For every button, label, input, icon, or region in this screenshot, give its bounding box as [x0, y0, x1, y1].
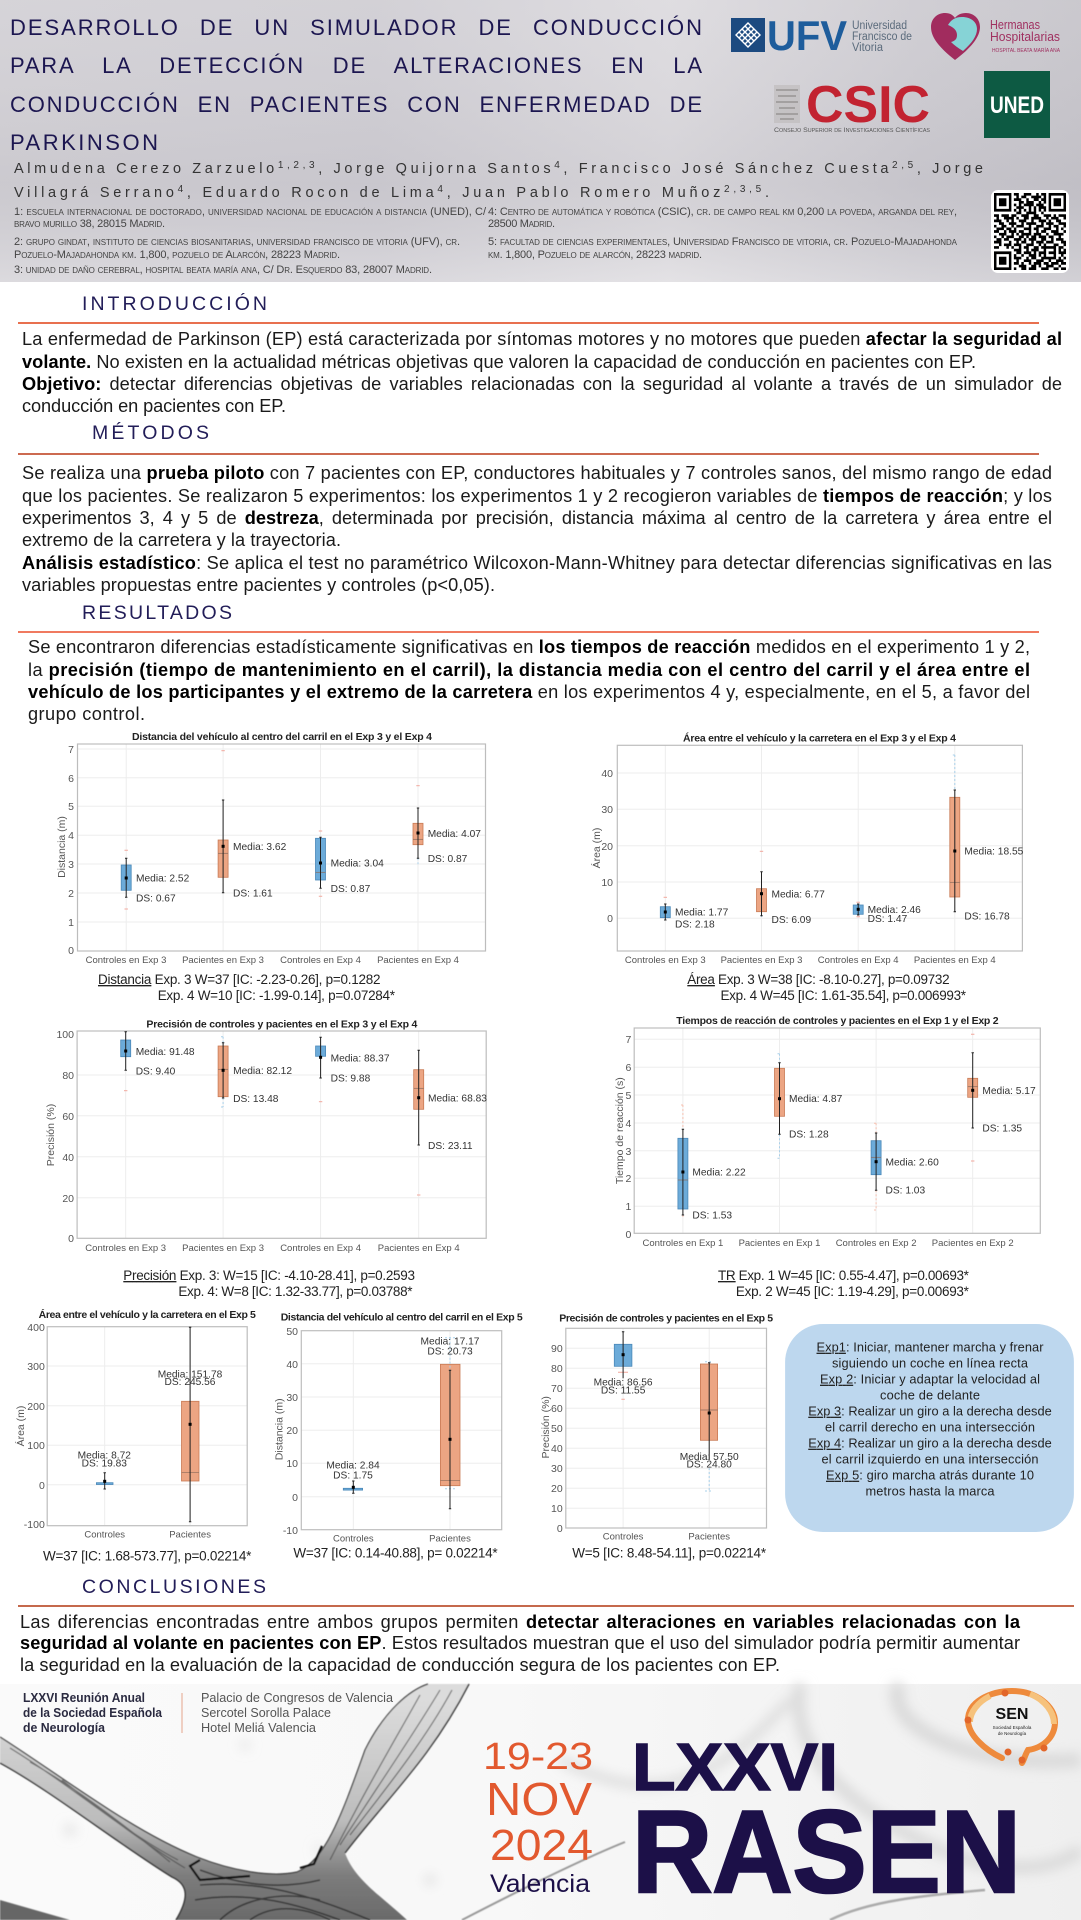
box: controles Exp 4: DS: 1.47 — [868, 914, 908, 925]
y axis: 20 — [601, 841, 613, 853]
callout: descripción de experimentos: Exp 3: Realizar un giro a la derecha desde — [808, 1404, 1052, 1419]
chart: tiempos de reacción Exp 1 y Exp 2 — [614, 1015, 1040, 1299]
logo: SEN: Sociedad Española — [993, 1725, 1032, 1730]
x axis — [625, 955, 996, 966]
y axis: 200 — [27, 1401, 45, 1413]
chart: precisión Exp 5 — [540, 1312, 773, 1561]
stats caption: TR Exp. 1 W=45 [IC: 0.55-4.47], p=0.00693* — [718, 1268, 970, 1283]
event dates: 19-23 — [483, 1736, 593, 1778]
x axis: Pacientes en Exp 4 — [377, 955, 459, 966]
y axis: Área (m) — [14, 1406, 27, 1446]
y axis: 100 — [27, 1440, 45, 1452]
x axis: Pacientes en Exp 4 — [378, 1243, 460, 1254]
title — [10, 15, 702, 155]
logo: Hermanas Hospitalarias — [931, 13, 1061, 60]
logo: UFV: Francisco de — [852, 31, 912, 43]
box: pacientes: Media: 151.78 — [158, 1369, 223, 1380]
affiliations — [14, 206, 958, 276]
chart title: Tiempos de reacción de controles y pacientes en el Exp 1 y el Exp 2 — [676, 1015, 999, 1027]
stats caption — [123, 1268, 415, 1299]
y axis: 0 — [626, 1229, 632, 1241]
stats caption: W=5 [IC: 8.48-54.11], p=0.02214* — [572, 1546, 767, 1561]
x axis: Pacientes en Exp 1 — [739, 1238, 820, 1249]
box: pacientes Exp 3: Media: 6.77 — [772, 889, 825, 900]
congress info: Hotel Meliá Valencia — [201, 1721, 316, 1735]
x axis: Pacientes — [688, 1531, 730, 1542]
y axis: 7 — [626, 1034, 632, 1046]
box: pacientes: DS: 24.80 — [687, 1460, 732, 1471]
chart title: Área entre el vehículo y la carretera en el Exp 3 y el Exp 4 — [683, 732, 956, 745]
box: pacientes Exp 3: Media: 3.62 — [233, 842, 287, 853]
congress info: Palacio de Congresos de Valencia — [201, 1691, 393, 1705]
authors: 4 — [437, 184, 443, 195]
box: pacientes Exp 1: DS: 1.28 — [789, 1130, 829, 1141]
box: controles Exp 4: Media: 2.46 — [868, 905, 921, 916]
panel: conclusiones — [18, 1576, 1074, 1675]
logo: UNED — [984, 71, 1050, 138]
affiliations: km. 1,800, Pozuelo de alarcón, 28223 madrid. — [488, 249, 702, 261]
box: controles: Media: 86.56 — [594, 1377, 653, 1388]
y axis: -10 — [283, 1525, 298, 1537]
text block: métodos: Se realiza una prueba piloto con 7 pacientes con EP, conductores habituales y 7 controles sanos, del mismo rango de edad — [22, 463, 1052, 483]
title: DESARROLLO DE UN SIMULADOR DE CONDUCCIÓN — [10, 15, 702, 40]
y axis: 40 — [601, 768, 613, 780]
authors: Villagrá Serrano — [14, 185, 174, 201]
callout: descripción de experimentos: Exp 5: giro marcha atrás durante 10 — [826, 1468, 1034, 1483]
y axis: 0 — [607, 913, 613, 925]
congress info — [23, 1691, 393, 1735]
x axis: Pacientes en Exp 3 — [721, 955, 802, 966]
x axis: Pacientes — [169, 1529, 211, 1540]
box: controles: Media: 8.72 — [78, 1451, 131, 1462]
authors: 4 — [178, 184, 184, 195]
callout: descripción de experimentos: Exp 4: Realizar un giro a la derecha desde — [808, 1436, 1052, 1451]
box: pacientes Exp 4 — [413, 786, 481, 865]
x axis — [86, 955, 459, 966]
box: controles Exp 4: DS: 0.87 — [331, 884, 371, 895]
box: pacientes Exp 3: DS: 6.09 — [772, 915, 811, 926]
y axis: Precisión (%) — [45, 1104, 57, 1166]
authors: , Juan Pablo Romero Muñoz — [447, 185, 720, 201]
box: pacientes Exp 3 — [218, 751, 287, 900]
panel: footer banner — [0, 1684, 1081, 1920]
box: pacientes — [158, 1327, 223, 1522]
box: controles Exp 3 — [660, 897, 729, 930]
chart title: Distancia del vehículo al centro del carril en el Exp 3 y el Exp 4 — [132, 731, 432, 743]
text block: introducción — [22, 329, 1062, 416]
congress info: LXXVI Reunión Anual — [23, 1691, 145, 1705]
text block: resultados: la precisión (tiempo de mantenimiento en el carril), la distancia media con el centro del carril y el área entre el — [28, 660, 1030, 680]
stats caption — [687, 972, 967, 1003]
y axis: 300 — [27, 1361, 45, 1373]
logo: CSIC: Consejo Superior de Investigaciones Científicas — [774, 127, 931, 134]
affiliations: bravo murillo 38, 28015 Madrid. — [14, 218, 165, 230]
heading: introducción: INTRODUCCIÓN — [82, 292, 267, 315]
heading: resultados: RESULTADOS — [82, 602, 232, 624]
chart: área Exp 3 y Exp 4 — [590, 732, 1024, 1003]
chart title: Área entre el vehículo y la carretera en el Exp 5 — [39, 1308, 256, 1321]
y axis: 10 — [601, 877, 613, 889]
chart title: Precisión de controles y pacientes en el Exp 5 — [559, 1312, 773, 1324]
affiliations: 2: grupo gindat, instituto de ciencias biosanitarias, universidad francisco de vitoria (UFV), cr. — [14, 236, 460, 248]
box: pacientes Exp 4: DS: 23.11 — [428, 1141, 473, 1152]
chart: área Exp 5 — [14, 1308, 256, 1564]
box: controles Exp 3 — [121, 850, 190, 909]
event dates: Valencia — [490, 1870, 590, 1898]
y axis: 4 — [68, 830, 74, 842]
box: pacientes — [421, 1336, 480, 1509]
y axis: 7 — [68, 744, 74, 756]
box: controles Exp 4: DS: 9.88 — [331, 1074, 371, 1085]
y axis: 40 — [286, 1359, 298, 1371]
text block: conclusiones: la seguridad en la evaluación de la capacidad de conducción segura de los pacientes con EP. — [20, 1655, 780, 1675]
box: controles — [78, 1451, 131, 1489]
logo: SEN: SEN — [996, 1706, 1028, 1723]
y axis: 100 — [56, 1029, 74, 1041]
y axis: 0 — [292, 1492, 298, 1504]
logo: Hermanas Hospitalarias: HOSPITAL BEATA MARÍA ANA — [992, 47, 1061, 54]
box: pacientes: DS: 245.56 — [165, 1377, 216, 1388]
box: controles — [594, 1332, 653, 1399]
header background — [0, 0, 1081, 282]
box: controles Exp 4: Media: 3.04 — [331, 859, 384, 870]
y axis — [590, 768, 613, 925]
y axis: 2 — [68, 888, 74, 900]
box: controles Exp 1: DS: 1.53 — [692, 1210, 732, 1221]
authors: 4 — [554, 160, 560, 171]
callout: descripción de experimentos: siguiendo un coche en línea recta — [832, 1356, 1029, 1371]
text block: resultados: grupo control. — [28, 704, 145, 724]
box: controles Exp 3: DS: 2.18 — [675, 919, 715, 930]
authors: 1,2,3 — [278, 160, 315, 171]
x axis: Pacientes en Exp 2 — [932, 1238, 1014, 1249]
event name — [632, 1730, 1021, 1917]
stats caption — [718, 1268, 970, 1299]
box: pacientes: Media: 57.50 — [680, 1452, 739, 1463]
x axis — [85, 1243, 460, 1254]
y axis: 0 — [68, 1233, 74, 1245]
y axis — [540, 1343, 563, 1535]
callout: descripción de experimentos: Exp 2: Iniciar y adaptar la velocidad al — [820, 1372, 1040, 1387]
box: controles Exp 4 — [316, 1037, 390, 1102]
x axis: Pacientes en Exp 4 — [914, 955, 996, 966]
box: controles: DS: 19.83 — [82, 1459, 127, 1470]
event name: LXXVI — [632, 1730, 838, 1805]
box: pacientes Exp 1: Media: 4.87 — [789, 1094, 843, 1105]
QR code — [991, 190, 1069, 273]
y axis: 3 — [68, 859, 74, 871]
y axis: 4 — [626, 1118, 632, 1130]
y axis: 10 — [286, 1458, 298, 1470]
text block: métodos: extremo de la carretera y la trayectoria. — [22, 530, 341, 550]
chart: distancia Exp 3 y Exp 4 — [56, 731, 486, 1003]
authors: , Eduardo Rocon de Lima — [187, 185, 435, 201]
stats caption: W=37 [IC: 0.14-40.88], p= 0.02214* — [293, 1546, 498, 1561]
y axis: 0 — [39, 1480, 45, 1492]
y axis: 50 — [286, 1326, 298, 1338]
box: controles Exp 3: Media: 2.52 — [136, 874, 190, 885]
affiliations: Pozuelo-Majadahonda km. 1,800, pozuelo de Alarcón, 28223 Madrid. — [14, 249, 340, 261]
affiliations: 5: facultad de ciencias experimentales, Universidad Francisco de vitoria, cr. Pozuelo-Majadahonda — [488, 236, 958, 248]
y axis — [274, 1326, 298, 1537]
x axis: Controles en Exp 3 — [625, 955, 706, 966]
affiliations: 28500 Madrid. — [488, 218, 555, 230]
box: pacientes Exp 4: Media: 4.07 — [428, 829, 481, 840]
y axis: 80 — [551, 1363, 563, 1375]
logo: SEN: de Neurología — [998, 1731, 1027, 1736]
panel: introducción — [18, 292, 1062, 416]
text block: métodos: Análisis estadístico: Se aplica el test no paramétrico Wilcoxon-Mann-Whitney para detectar diferencias significativas en las — [22, 553, 1052, 573]
text block: conclusiones: seguridad al volante en pacientes con EP. Estos resultados muestran que el uso del simulador podría permitir aumentar — [20, 1633, 1020, 1653]
box: pacientes Exp 1 — [774, 1054, 843, 1158]
logo: UFV: UFV — [767, 12, 847, 59]
callout: descripción de experimentos: el carril derecho en una intersección — [825, 1420, 1035, 1435]
x axis: Controles en Exp 4 — [280, 955, 361, 966]
text block: métodos: experimentos 3, 4 y 5 de destreza, determinada por precisión, distancia máxima al centro de la carretera y área entre el — [22, 508, 1052, 528]
box: controles Exp 4 — [316, 831, 384, 896]
stats caption: Área Exp. 3 W=38 [IC: -8.10-0.27], p=0.09732 — [687, 972, 950, 987]
y axis: 20 — [286, 1425, 298, 1437]
authors: . — [765, 185, 769, 201]
authors: , Francisco José Sánchez Cuesta — [563, 161, 889, 177]
y axis: 20 — [62, 1193, 74, 1205]
box: pacientes Exp 4: DS: 16.78 — [964, 911, 1010, 922]
box: pacientes Exp 2: DS: 1.35 — [982, 1123, 1022, 1134]
y axis: -100 — [24, 1519, 45, 1531]
box: pacientes Exp 4: Media: 68.83 — [428, 1093, 487, 1104]
authors: Almudena Cerezo Zarzuelo — [14, 161, 274, 177]
y axis: 80 — [62, 1070, 74, 1082]
box: controles Exp 2 — [871, 1123, 939, 1210]
box: controles Exp 2: DS: 1.03 — [886, 1186, 925, 1197]
congress info: de la Sociedad Española — [23, 1706, 163, 1720]
y axis: 90 — [551, 1343, 563, 1355]
text block: conclusiones — [20, 1612, 1021, 1675]
y axis: 30 — [601, 804, 613, 816]
title: CONDUCCIÓN EN PACIENTES CON ENFERMEDAD DE — [10, 92, 702, 117]
box: controles Exp 3: Media: 1.77 — [675, 907, 729, 918]
y axis: 5 — [626, 1090, 632, 1102]
logo: UFV: Vitoria — [852, 42, 884, 54]
text block: introducción: volante. No existen en la actualidad métricas objetivas que valoren la capacidad de conducción en pacientes con EP. — [22, 352, 976, 372]
authors: 2,3,5 — [724, 184, 762, 195]
title: PARA LA DETECCIÓN DE ALTERACIONES EN LA — [10, 53, 702, 78]
x axis: Controles — [333, 1533, 374, 1544]
box: controles: Media: 2.84 — [326, 1460, 380, 1471]
text block: introducción: La enfermedad de Parkinson (EP) está caracterizada por síntomas motores y no motores que pueden afectar la seguridad al — [22, 329, 1062, 349]
x axis: Controles — [84, 1529, 125, 1540]
event dates: NOV — [486, 1773, 592, 1825]
x axis — [603, 1531, 730, 1542]
y axis: 60 — [62, 1111, 74, 1123]
text block: resultados — [28, 637, 1030, 724]
y axis: 3 — [626, 1146, 632, 1158]
x axis: Pacientes en Exp 3 — [182, 1243, 264, 1254]
event name: RASEN — [632, 1786, 1021, 1917]
logo: UFV — [731, 12, 912, 59]
y axis: Área (m) — [590, 828, 603, 868]
callout: descripción de experimentos: metros hasta la marca — [866, 1484, 995, 1499]
y axis: 40 — [62, 1152, 74, 1164]
x axis: Pacientes en Exp 3 — [182, 955, 264, 966]
y axis: 60 — [551, 1403, 563, 1415]
stats caption: Distancia Exp. 3 W=37 [IC: -2.23-0.26], p=0.1282 — [98, 972, 380, 987]
authors: , Jorge Quijorna Santos — [318, 161, 551, 177]
x axis — [643, 1238, 1014, 1249]
y axis: 1 — [626, 1201, 632, 1213]
y axis — [14, 1322, 45, 1531]
box: pacientes Exp 3: DS: 13.48 — [233, 1094, 279, 1105]
text block: métodos: variables propuestas entre pacientes y controles (p<0,05). — [22, 575, 495, 595]
x axis: Controles en Exp 2 — [836, 1238, 916, 1249]
logo: Hermanas Hospitalarias: Hermanas — [990, 18, 1040, 32]
box: controles: DS: 11.55 — [601, 1385, 646, 1396]
stats caption: Exp. 2 W=45 [IC: 1.19-4.29], p=0.00693* — [736, 1284, 970, 1299]
congress info: Sercotel Sorolla Palace — [201, 1706, 331, 1720]
logo: Hermanas Hospitalarias: Hospitalarias — [990, 30, 1060, 44]
panel: header — [0, 0, 1081, 282]
box: pacientes Exp 4 — [414, 1050, 487, 1195]
footer background — [0, 1684, 1081, 1920]
y axis — [45, 1029, 74, 1245]
stats caption — [98, 972, 396, 1003]
text block: introducción: Objetivo: detectar diferencias objetivas de variables relacionadas con la seguridad al volante a través de un simulador de — [22, 374, 1062, 394]
box: controles — [326, 1460, 380, 1493]
x axis — [84, 1529, 211, 1540]
y axis: 50 — [551, 1423, 563, 1435]
panel: métodos — [18, 421, 1052, 595]
box: controles Exp 1: Media: 2.22 — [692, 1168, 746, 1179]
box: pacientes Exp 3: Media: 82.12 — [233, 1066, 292, 1077]
x axis: Pacientes — [429, 1533, 471, 1544]
text block: introducción: conducción en pacientes con EP. — [22, 396, 286, 416]
stats caption: Exp. 4: W=8 [IC: 1.32-33.77], p=0.03788* — [178, 1284, 413, 1299]
chart: precisión Exp 3 y Exp 4 — [45, 1018, 487, 1299]
y axis: 400 — [27, 1322, 45, 1334]
stats caption: Exp. 4 W=45 [IC: 1.61-35.54], p=0.006993* — [720, 988, 967, 1003]
congress info: de Neurología — [23, 1721, 106, 1735]
callout: descripción de experimentos: coche de delante — [880, 1388, 980, 1403]
text block: métodos — [22, 463, 1052, 595]
authors: 2,5 — [892, 160, 914, 171]
box: pacientes Exp 2: Media: 5.17 — [982, 1086, 1036, 1097]
y axis: 40 — [551, 1443, 563, 1455]
stats caption: Precisión Exp. 3: W=15 [IC: -4.10-28.41], p=0.2593 — [123, 1268, 415, 1283]
chart title: Precisión de controles y pacientes en el Exp 3 y el Exp 4 — [146, 1018, 418, 1030]
y axis: 70 — [551, 1383, 563, 1395]
box: controles Exp 2: Media: 2.60 — [886, 1157, 939, 1168]
y axis: Tiempo de reacción (s) — [614, 1077, 626, 1184]
x axis — [333, 1533, 471, 1544]
y axis: 30 — [286, 1392, 298, 1404]
y axis: 5 — [68, 801, 74, 813]
callout: descripción de experimentos: Exp1: Iniciar, mantener marcha y frenar — [816, 1340, 1044, 1355]
x axis: Controles en Exp 3 — [86, 955, 166, 966]
box: pacientes — [680, 1362, 739, 1491]
text block: resultados: Se encontraron diferencias estadísticamente significativas en los tiempos de reacción medidos en el experimento 1 y 2, — [28, 637, 1030, 657]
authors: , Jorge — [917, 161, 983, 177]
affiliations: 1: escuela internacional de doctorado, universidad nacional de educación a distancia (UNED), C/ — [14, 206, 487, 218]
box: controles Exp 3: DS: 9.40 — [136, 1066, 176, 1077]
y axis — [614, 1034, 632, 1241]
logo: CSIC: CSIC — [806, 76, 930, 134]
y axis: Distancia (m) — [274, 1398, 286, 1460]
y axis: 6 — [626, 1062, 632, 1074]
event dates: 2024 — [490, 1821, 593, 1870]
logo: UFV: Universidad — [852, 20, 907, 32]
box: pacientes Exp 3 — [756, 851, 825, 926]
text block: resultados: vehículo de los participantes y el extremo de la carretera en los experimentos 4 y, especialmente, en el 5, a favor del — [28, 682, 1030, 702]
y axis: Distancia (m) — [56, 816, 68, 878]
box: controles Exp 4 — [853, 902, 921, 925]
box: controles: DS: 1.75 — [333, 1470, 373, 1481]
y axis: 20 — [551, 1483, 563, 1495]
y axis: 0 — [68, 945, 74, 957]
heading: métodos: MÉTODOS — [92, 421, 209, 444]
stats caption: W=37 [IC: 1.68-573.77], p=0.02214* — [43, 1549, 252, 1564]
box: pacientes Exp 4 — [950, 755, 1024, 922]
x axis: Controles en Exp 1 — [643, 1238, 723, 1249]
chart title: Distancia del vehículo al centro del carril en el Exp 5 — [281, 1312, 523, 1324]
box: pacientes: Media: 17.17 — [421, 1336, 480, 1347]
x axis: Controles en Exp 3 — [85, 1243, 166, 1254]
box: controles Exp 3: DS: 0.67 — [136, 894, 176, 905]
box: controles Exp 1 — [678, 1105, 746, 1221]
box: pacientes Exp 3 — [218, 1037, 292, 1107]
box: pacientes Exp 2 — [968, 1034, 1036, 1161]
callout: descripción de experimentos — [785, 1324, 1074, 1532]
heading: conclusiones: CONCLUSIONES — [82, 1576, 266, 1598]
y axis — [56, 744, 74, 957]
affiliations: 3: unidad de daño cerebral, hospital beata maría ana, C/ Dr. Esquerdo 83, 28007 Madrid. — [14, 264, 432, 276]
box: pacientes Exp 4: DS: 0.87 — [428, 854, 468, 865]
box: pacientes: DS: 20.73 — [427, 1346, 473, 1357]
box: controles Exp 4: Media: 88.37 — [331, 1053, 390, 1064]
y axis: 2 — [626, 1173, 632, 1185]
box: controles Exp 3: Media: 91.48 — [136, 1047, 195, 1058]
y axis: 6 — [68, 773, 74, 785]
logo: UNED: UNED — [990, 92, 1044, 119]
neuron illustration — [0, 1684, 985, 1920]
x axis: Controles en Exp 4 — [280, 1243, 361, 1254]
title: PARKINSON — [10, 130, 158, 155]
y axis: Precisión (%) — [540, 1396, 552, 1459]
callout: descripción de experimentos: el carril izquierdo en una intersección — [822, 1452, 1038, 1467]
y axis: 1 — [68, 917, 74, 929]
text block: conclusiones: Las diferencias encontradas entre ambos grupos permiten detectar alteraciones en variables relacionadas con la — [20, 1612, 1021, 1632]
panel: resultados — [18, 602, 1039, 724]
box: controles Exp 3 — [121, 1032, 195, 1091]
x axis: Controles — [603, 1531, 644, 1542]
y axis: 10 — [551, 1503, 563, 1515]
authors — [14, 160, 983, 201]
chart: distancia Exp 5 — [274, 1312, 523, 1561]
affiliations: 4: Centro de automática y robótica (CSIC), cr. de campo real km 0,200 la poveda, arganda del rey, — [488, 206, 957, 218]
y axis: 0 — [557, 1523, 563, 1535]
box: pacientes Exp 3: DS: 1.61 — [233, 889, 273, 900]
box: pacientes Exp 4: Media: 18.55 — [964, 846, 1024, 857]
x axis: Controles en Exp 4 — [818, 955, 899, 966]
text block: métodos: que los pacientes. Se realizaron 5 experimentos: los experimentos 1 y 2 recogieron variables de tiempos de reacción; y los — [22, 486, 1052, 506]
event dates — [483, 1736, 593, 1898]
y axis: 30 — [551, 1463, 563, 1475]
stats caption: Exp. 4 W=10 [IC: -1.99-0.14], p=0.07284* — [158, 988, 396, 1003]
logo: SEN — [964, 1690, 1055, 1764]
